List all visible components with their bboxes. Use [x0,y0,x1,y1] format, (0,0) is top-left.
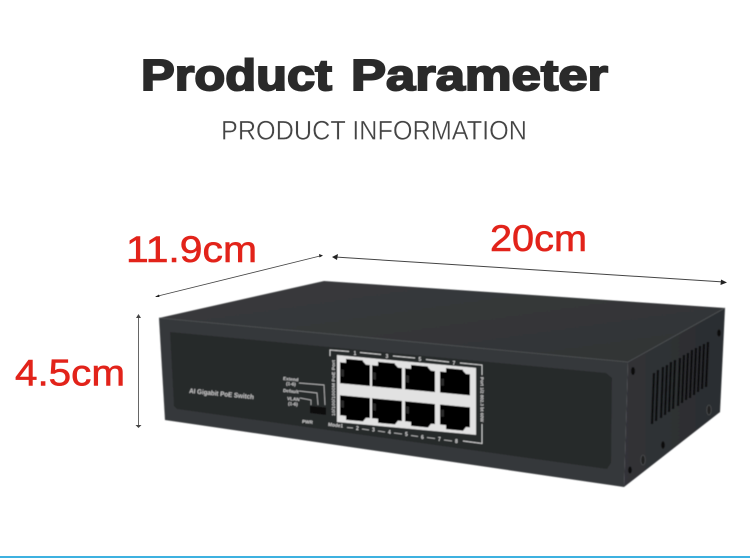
switch top face [159,281,725,362]
mode switch labels [283,376,314,425]
mode switch leader lines [299,383,325,405]
side screws [628,329,721,474]
bottom row ports [340,395,470,431]
side vent slots [652,342,708,424]
title [141,51,608,100]
dimension label: height: 4.5cm [15,352,125,394]
product photo: PoE switch [159,281,725,487]
port numbers bottom row: 3 [372,428,375,434]
port numbers top row: 5 [418,357,422,363]
front label text: AI Gigabit PoE Switch [189,388,254,401]
port numbers bottom row: 5 [405,432,408,438]
dimension label: width: 20cm [490,218,587,259]
vertical port label right: Port 1/2 802.3 bt 60W [480,377,484,423]
port numbers top row: 7 [452,361,456,367]
RJ45 port block [337,355,476,435]
mode switch labels: Extend [283,376,299,382]
port number bracket [330,350,482,444]
port numbers top row: 1 [354,351,356,357]
mode switch labels: PWR [302,419,314,425]
port numbers bottom row: 2 [356,426,359,432]
port numbers top row [354,351,456,367]
mode switch labels: (1-6) [288,401,298,407]
front inset panel [170,332,612,469]
arrow: width [332,254,727,285]
switch front face [159,318,628,487]
port numbers bottom row: 8 [455,439,458,445]
port numbers bottom row: Mode1 [328,422,344,430]
bottom blue rule [0,556,750,558]
port numbers bottom row [328,422,458,445]
title: Product [141,51,332,100]
mode switch labels: VLAN [287,396,300,402]
bottom row separators [347,428,452,441]
top front edge highlight [159,308,725,362]
switch right side face [624,308,725,487]
port numbers bottom row: 4 [388,430,391,436]
dimension label: depth: 11.9cm [126,229,257,270]
mode switch [310,406,326,415]
port numbers bottom row: 7 [438,437,441,443]
top row ports [340,358,470,395]
arrow: height [136,314,142,428]
port numbers bottom row: 6 [421,435,424,441]
mode switch labels: (1-6) [286,381,296,387]
title: Parameter [351,51,608,100]
vertical port label left: 10/100/1000M PoE Port [331,359,336,416]
arrow: depth [155,254,323,297]
subtitle: PRODUCT INFORMATION [221,116,527,146]
port numbers top row: 3 [386,354,388,360]
mode switch labels: Default [283,388,299,394]
